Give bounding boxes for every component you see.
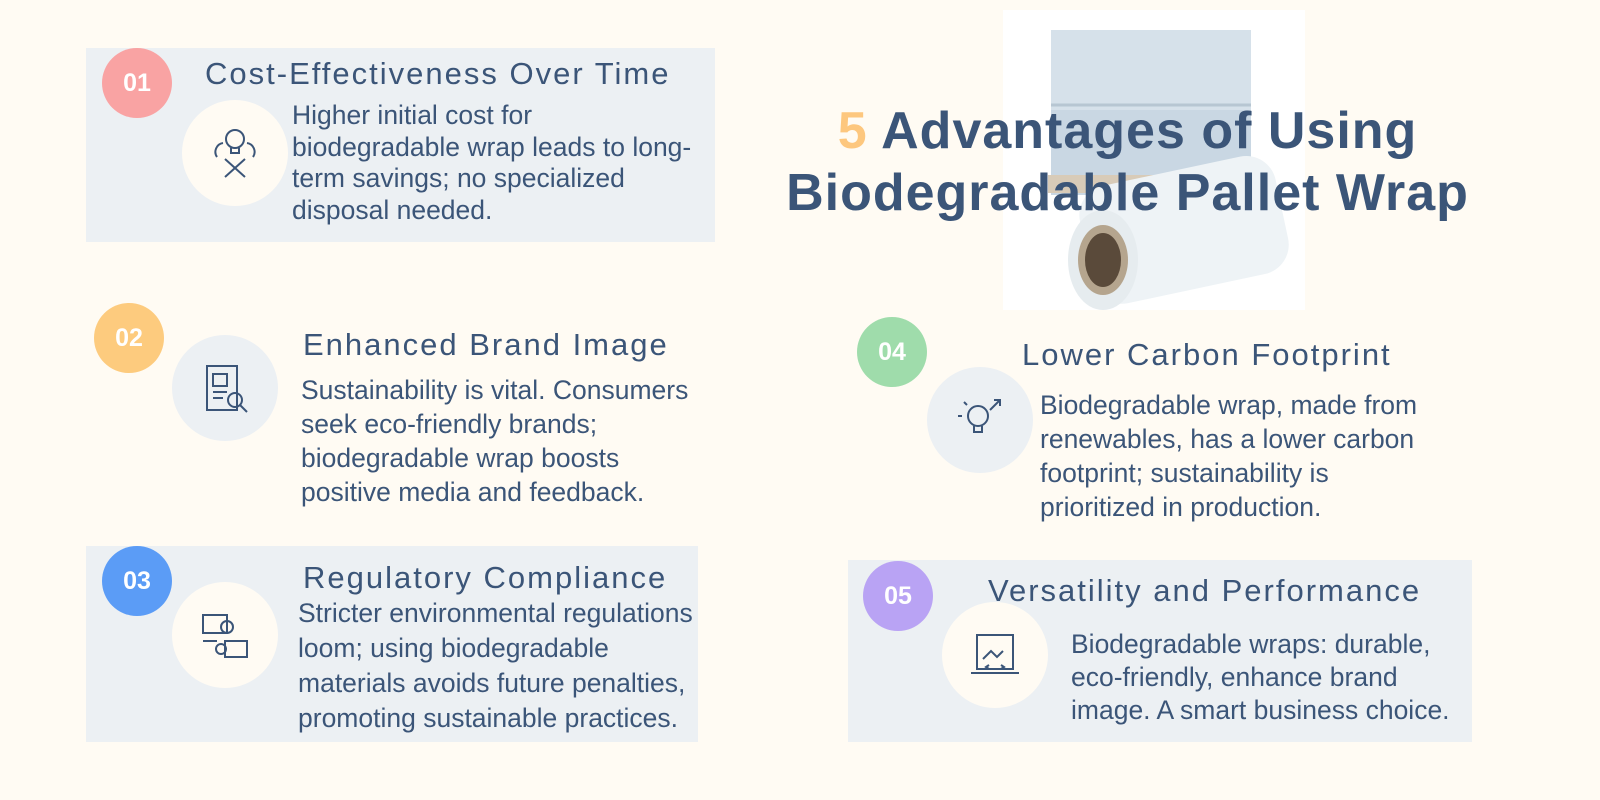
icon: lightbulb cloud: [182, 100, 288, 206]
body text: image. A smart business choice.: [1071, 695, 1450, 725]
body text: [298, 598, 693, 733]
icon: lightbulb growth: [927, 367, 1033, 473]
panel: 05 versatility: [848, 560, 1472, 742]
icon: workflow: [172, 582, 278, 688]
body text: loom; using biodegradable: [298, 633, 609, 663]
body text: [1040, 390, 1417, 522]
icon: laptop image: [942, 602, 1048, 708]
body text: prioritized in production.: [1040, 492, 1321, 522]
badge 03: [102, 546, 172, 616]
body text: Biodegradable wraps: durable,: [1071, 629, 1430, 659]
heading: Cost-Effectiveness Over Time: [205, 56, 670, 91]
panel: 01 cost-effectiveness: [86, 48, 715, 242]
body text: positive media and feedback.: [301, 477, 644, 507]
body text: disposal needed.: [292, 194, 492, 224]
body text: [1071, 629, 1450, 725]
body text: footprint; sustainability is: [1040, 458, 1329, 488]
body text: Biodegradable wrap, made from: [1040, 390, 1417, 420]
heading: Versatility and Performance: [988, 573, 1421, 608]
body text: renewables, has a lower carbon: [1040, 424, 1414, 454]
item 02 brand image: [94, 303, 688, 507]
body text: Sustainability is vital. Consumers: [301, 375, 688, 405]
badge 03: 03: [123, 566, 151, 594]
title: [786, 102, 1469, 222]
body text: promoting sustainable practices.: [298, 703, 678, 733]
heading: Enhanced Brand Image: [303, 327, 669, 362]
body text: seek eco-friendly brands;: [301, 409, 597, 439]
badge 05: 05: [884, 582, 912, 610]
title: Biodegradable Pallet Wrap: [786, 164, 1469, 222]
body text: biodegradable wrap leads to long-: [292, 132, 691, 162]
body text: Higher initial cost for: [292, 100, 532, 130]
body text: materials avoids future penalties,: [298, 668, 685, 698]
product image: [1003, 10, 1305, 310]
body text: biodegradable wrap boosts: [301, 443, 619, 473]
badge 04: 04: [878, 338, 906, 366]
heading: Regulatory Compliance: [303, 560, 667, 595]
badge 01: 01: [123, 68, 151, 96]
body text: [292, 100, 691, 224]
body text: Stricter environmental regulations: [298, 598, 693, 628]
title: 5 Advantages of Using: [838, 102, 1417, 160]
body text: [301, 375, 688, 507]
badge 02: [94, 303, 164, 373]
badge 01: [102, 48, 172, 118]
badge 05: [863, 561, 933, 631]
badge 02: 02: [115, 324, 143, 352]
body text: term savings; no specialized: [292, 163, 625, 193]
item 04 carbon footprint: [857, 317, 1417, 522]
badge 04: [857, 317, 927, 387]
heading: Lower Carbon Footprint: [1022, 337, 1392, 372]
icon: document search: [172, 335, 278, 441]
panel: 03 regulatory: [86, 546, 698, 742]
body text: eco-friendly, enhance brand: [1071, 662, 1398, 692]
